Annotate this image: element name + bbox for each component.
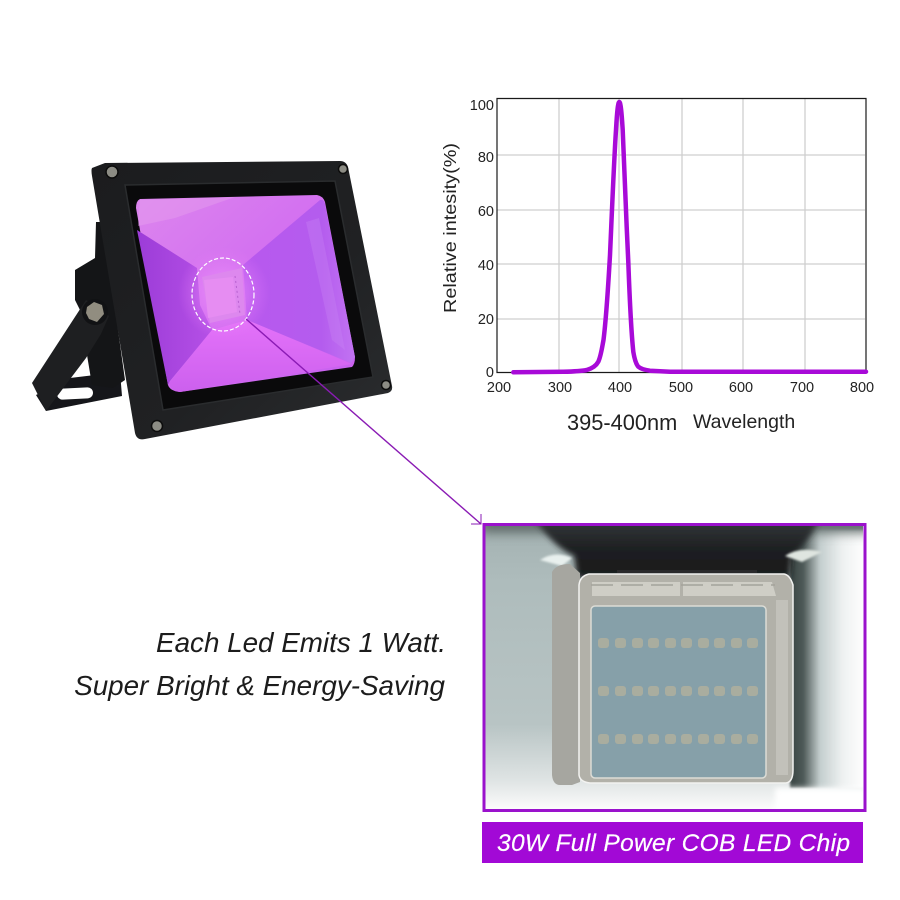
x-axis tick labels: 500: [669, 380, 693, 396]
x-axis tick labels: 400: [608, 380, 632, 396]
text block: description: Super Bright & Energy-Saving: [74, 670, 446, 701]
y-axis tick labels: 40: [478, 258, 494, 274]
spectrum curve: [513, 102, 866, 372]
x-axis title: Wavelength: [693, 411, 795, 433]
y-axis tick labels: [470, 98, 494, 381]
x-axis tick labels: 200: [487, 380, 511, 396]
label: chip caption: 30W Full Power COB LED Chip: [497, 830, 850, 857]
wavelength peak label: 395-400nm: [567, 410, 677, 435]
y-axis title: Relative intesity(%): [440, 143, 460, 313]
y-axis tick labels: 0: [486, 365, 494, 381]
chip photo background: [480, 518, 875, 812]
y-axis tick labels: 80: [478, 150, 494, 166]
chart: spectrum: [440, 98, 874, 435]
x-axis tick labels: 300: [548, 380, 572, 396]
panel: COB chip close-up: [480, 518, 875, 812]
y-axis tick labels: 60: [478, 204, 494, 220]
x-axis tick labels: 800: [850, 380, 874, 396]
chip blue die: [591, 606, 766, 778]
icon: lamp screws: [106, 164, 390, 432]
y-axis tick labels: 100: [470, 98, 494, 114]
icon: lamp bracket: [32, 222, 125, 411]
chip side rail: [552, 564, 580, 785]
chip top contacts: [592, 582, 776, 596]
y-axis tick labels: 20: [478, 312, 494, 328]
floodlight lamp photo: [32, 161, 392, 439]
text block: description: [74, 627, 446, 701]
dashed circle: [192, 258, 254, 331]
x-axis tick labels: [487, 380, 874, 396]
icon: purple reflector: [136, 195, 355, 392]
chart grid: [497, 99, 865, 372]
text block: description: Each Led Emits 1 Watt.: [156, 627, 446, 658]
chip body: [579, 574, 793, 783]
chip right edge: [776, 600, 788, 775]
icon: lamp frame: [92, 161, 392, 439]
label: chip caption: [482, 822, 863, 863]
chart axes: [497, 98, 866, 372]
arrow: lamp chip to zoomed panel: [246, 319, 481, 524]
LED rows: [598, 638, 758, 744]
x-axis tick labels: 600: [729, 380, 753, 396]
icon: chip on lamp: [202, 268, 245, 323]
x-axis tick labels: 700: [790, 380, 814, 396]
chip dark top edge: [617, 570, 757, 573]
panel border: [484, 524, 865, 810]
